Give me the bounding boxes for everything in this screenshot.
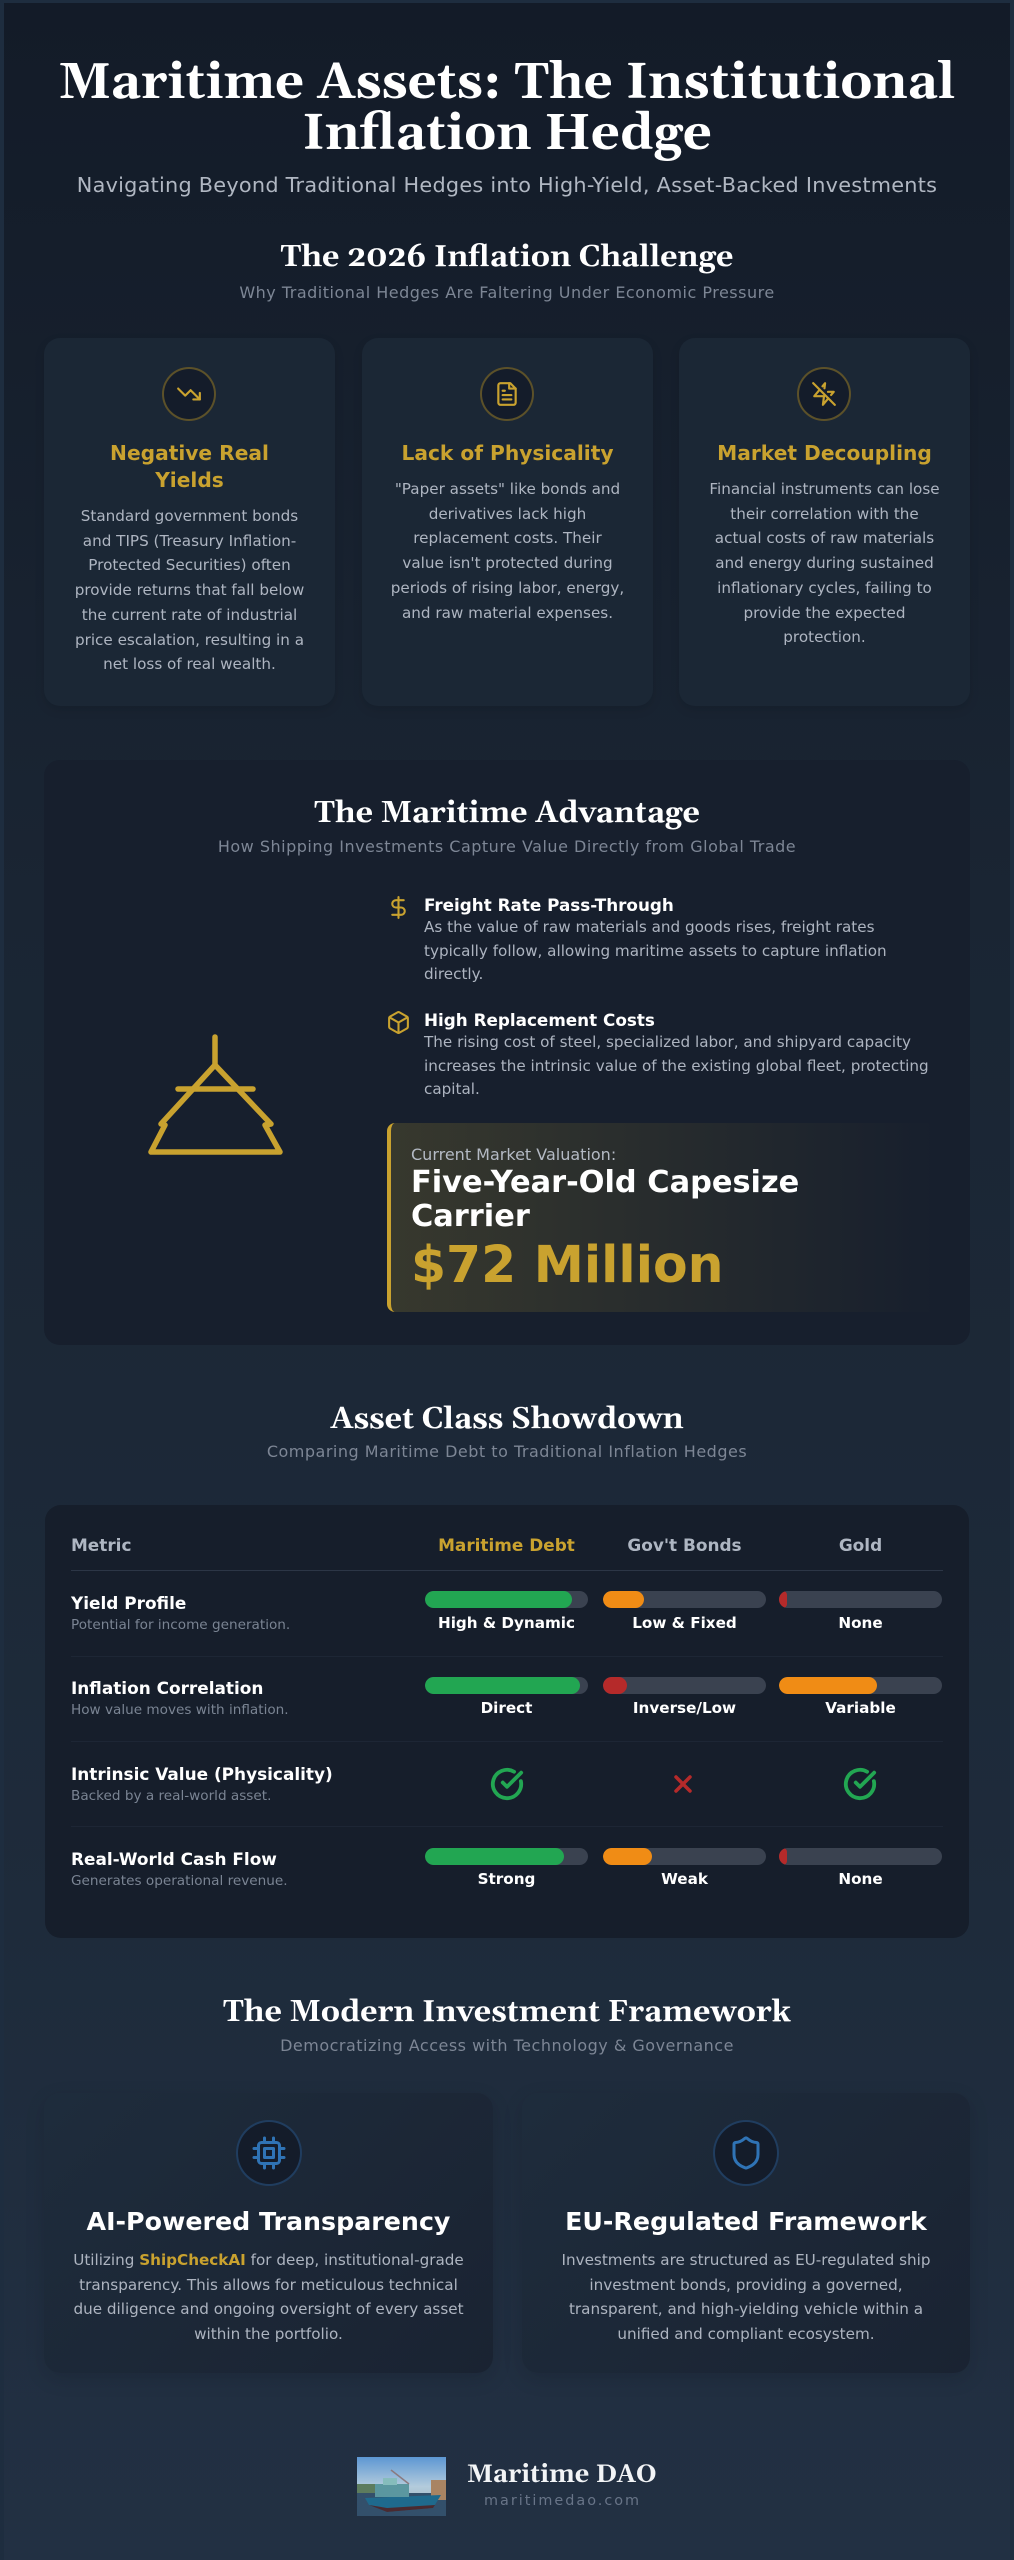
- row note: How value moves with inflation.: [71, 1702, 289, 1718]
- benefit text: capital.: [424, 1080, 480, 1098]
- footer logo: ship photo: [357, 2457, 446, 2516]
- column: gold: Gold: [839, 1535, 882, 1555]
- icon: check gold: [844, 1768, 876, 1800]
- footer brand: Maritime DAO: [467, 2459, 657, 2491]
- benefit: freight rate: [424, 895, 887, 983]
- value: None: [838, 1614, 883, 1632]
- value: High & Dynamic: [438, 1614, 575, 1632]
- benefit text: typically follow, allowing maritime assets to capture inflation: [424, 942, 887, 960]
- bar: gold cash flow: [779, 1848, 942, 1865]
- title: Maritime Assets: The Institutional: [59, 52, 955, 116]
- panel: lack of physicality: [362, 338, 653, 706]
- asset name: [411, 1165, 799, 1234]
- panel: AI transparency: [44, 2093, 493, 2373]
- card text: Investments are structured as EU-regulated ship: [562, 2251, 930, 2269]
- card text: [73, 2251, 464, 2343]
- card text: [562, 2251, 930, 2343]
- benefit: replacement costs: [424, 1010, 929, 1098]
- column: metric: Metric: [71, 1535, 131, 1555]
- row note: Generates operational revenue.: [71, 1873, 288, 1889]
- card heading: AI-Powered Transparency: [87, 2207, 450, 2236]
- card text: value isn't protected during: [402, 554, 613, 572]
- card text: Standard government bonds: [81, 507, 298, 525]
- card text: and raw material expenses.: [402, 604, 613, 622]
- row note: Potential for income generation.: [71, 1617, 290, 1633]
- column: maritime debt: Maritime Debt: [438, 1535, 575, 1555]
- bar: maritime yield: [425, 1591, 588, 1608]
- card heading: Lack of Physicality: [401, 441, 614, 465]
- benefit text: The rising cost of steel, specialized labor, and shipyard capacity: [424, 1033, 911, 1051]
- card text: "Paper assets" like bonds and: [395, 480, 620, 498]
- icon: shield: [713, 2120, 779, 2186]
- card text: price escalation, resulting in a: [75, 631, 304, 649]
- card text: protection.: [783, 628, 866, 646]
- card text: actual costs of raw materials: [715, 529, 934, 547]
- icon: trending down: [162, 367, 216, 421]
- table header: [71, 1534, 943, 1571]
- row note: Backed by a real-world asset.: [71, 1788, 271, 1804]
- value: Inverse/Low: [633, 1699, 736, 1717]
- card text: unified and compliant ecosystem.: [617, 2325, 875, 2343]
- footer url: maritimedao.com: [484, 2493, 641, 2509]
- row: cash flow: Real-World Cash Flow: [71, 1849, 277, 1869]
- card text: transparency. This allows for meticulous technical: [79, 2276, 458, 2294]
- section subheading: Democratizing Access with Technology & Governance: [280, 2036, 734, 2055]
- card text: investment bonds, providing a governed,: [589, 2276, 903, 2294]
- price: $72 Million: [411, 1235, 723, 1294]
- bar: maritime correlation: [425, 1677, 588, 1694]
- value: Direct: [481, 1699, 532, 1717]
- card text: Financial instruments can lose: [709, 480, 940, 498]
- bar: bonds correlation: [603, 1677, 766, 1694]
- benefit heading: Freight Rate Pass-Through: [424, 895, 674, 915]
- value: None: [838, 1870, 883, 1888]
- panel: maritime advantage: [44, 760, 970, 1345]
- card text: provide returns that fall below: [75, 581, 304, 599]
- card text: their correlation with the: [730, 505, 919, 523]
- icon: cross bonds: [674, 1775, 692, 1793]
- section heading: framework: The Modern Investment Framework: [223, 1994, 791, 2032]
- card text: [709, 480, 940, 646]
- icon: file: [480, 367, 534, 421]
- card text: transparent, and high-yielding vehicle within a: [569, 2300, 923, 2318]
- card text: derivatives lack high: [429, 505, 586, 523]
- value: Low & Fixed: [632, 1614, 737, 1632]
- bar: bonds cash flow: [603, 1848, 766, 1865]
- card text: the current rate of industrial: [82, 606, 297, 624]
- panel: market decoupling: [679, 338, 970, 706]
- card text: replacement costs. Their: [413, 529, 602, 547]
- card text: and energy during sustained: [715, 554, 934, 572]
- bar: gold yield: [779, 1591, 942, 1608]
- value: Variable: [825, 1699, 896, 1717]
- callout: valuation: [387, 1123, 937, 1312]
- icon: zap off: [797, 367, 851, 421]
- icon: dollar: [391, 896, 406, 919]
- card heading: Yields: [155, 468, 224, 492]
- icon: box: [388, 1011, 409, 1034]
- card text: inflationary cycles, failing to: [717, 579, 932, 597]
- title: Inflation Hedge: [302, 103, 712, 167]
- panel: comparison table: [45, 1505, 969, 1938]
- card heading: Negative Real: [110, 441, 269, 465]
- section heading: inflation challenge: The 2026 Inflation Challenge: [281, 239, 733, 277]
- icon: chip: [236, 2120, 302, 2186]
- card text: net loss of real wealth.: [103, 655, 276, 673]
- title: [59, 52, 955, 167]
- section subheading: Comparing Maritime Debt to Traditional Inflation Hedges: [267, 1442, 747, 1461]
- benefit text: As the value of raw materials and goods rises, freight rates: [424, 918, 875, 936]
- panel: negative real yields: [44, 338, 335, 706]
- card text: [391, 480, 624, 622]
- value: Strong: [478, 1870, 535, 1888]
- bar: bonds yield: [603, 1591, 766, 1608]
- card heading: [110, 441, 269, 492]
- card text: periods of rising labor, energy,: [391, 579, 624, 597]
- column: bonds: Gov't Bonds: [627, 1535, 742, 1555]
- bar: gold correlation: [779, 1677, 942, 1694]
- subtitle: Navigating Beyond Traditional Hedges into High-Yield, Asset-Backed Investments: [77, 173, 937, 197]
- section heading: The Maritime Advantage: [314, 795, 700, 833]
- card text: Protected Securities) often: [88, 556, 291, 574]
- row: intrinsic value: Intrinsic Value (Physicality): [71, 1764, 333, 1784]
- section heading: showdown: Asset Class Showdown: [330, 1401, 684, 1439]
- benefit text: [424, 1033, 929, 1098]
- value: Weak: [661, 1870, 708, 1888]
- benefit text: [424, 918, 887, 983]
- card text: [75, 507, 304, 673]
- card text: within the portfolio.: [194, 2325, 343, 2343]
- row: yield profile: Yield Profile: [71, 1593, 186, 1613]
- section subheading: Why Traditional Hedges Are Faltering Under Economic Pressure: [239, 283, 775, 302]
- asset name: Five-Year-Old Capesize: [411, 1165, 799, 1200]
- label: Current Market Valuation:: [411, 1145, 616, 1164]
- card heading: Market Decoupling: [717, 441, 932, 465]
- row: inflation correlation: Inflation Correlation: [71, 1678, 263, 1698]
- card heading: EU-Regulated Framework: [565, 2207, 927, 2236]
- section subheading: How Shipping Investments Capture Value Directly from Global Trade: [218, 837, 796, 856]
- icon: check maritime: [490, 1768, 524, 1800]
- benefit text: increases the intrinsic value of the existing global fleet, protecting: [424, 1057, 929, 1075]
- card text: due diligence and ongoing oversight of every asset: [73, 2300, 464, 2318]
- card text: and TIPS (Treasury Inflation-: [83, 532, 296, 550]
- benefit text: directly.: [424, 965, 483, 983]
- icon: ship: [148, 1034, 283, 1155]
- asset name: Carrier: [411, 1199, 530, 1234]
- bar: maritime cash flow: [425, 1848, 588, 1865]
- benefit heading: High Replacement Costs: [424, 1010, 655, 1030]
- panel: EU framework: [522, 2093, 970, 2373]
- card text: provide the expected: [744, 604, 905, 622]
- card text: Utilizing ShipCheckAI for deep, institutional-grade: [73, 2251, 464, 2269]
